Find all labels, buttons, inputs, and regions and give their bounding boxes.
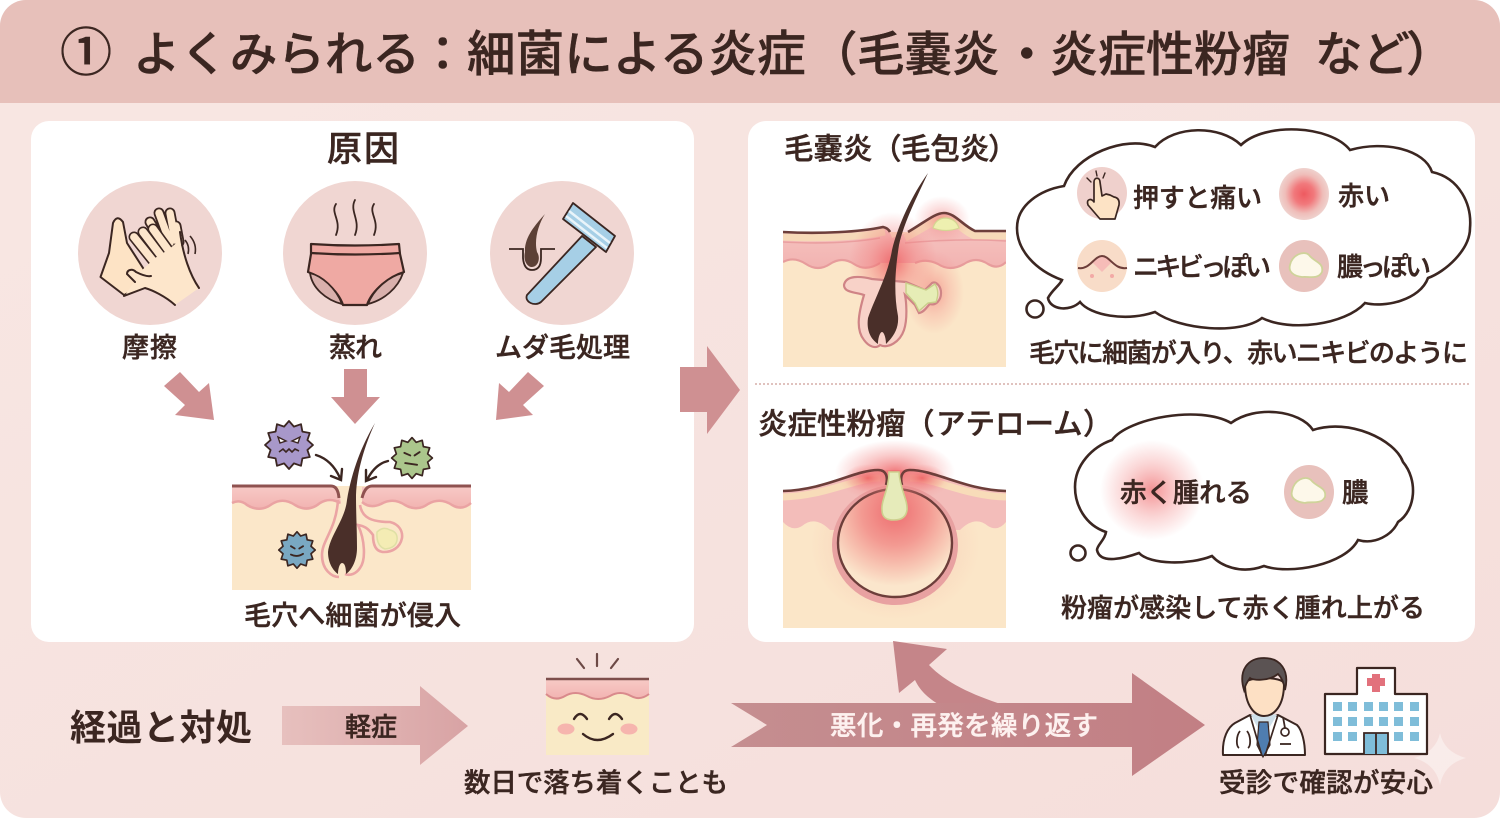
thought bubble: folliculitis symptoms: [1017, 129, 1470, 328]
icon: redness: [1279, 168, 1329, 220]
title: 炎症性粉瘤: [1050, 29, 1290, 82]
title: （: [810, 29, 858, 82]
bacterium: purple: [265, 421, 313, 469]
label: mild: 軽症: [345, 712, 397, 742]
label: hair removal: ムダ毛処理: [495, 333, 630, 363]
heading: course and treatment: 経過と対処: [70, 707, 252, 748]
icon: doctor: [1223, 658, 1305, 757]
bacterium: green: [392, 438, 432, 478]
heading: folliculitis: （: [872, 133, 902, 166]
icon: pus: [1284, 465, 1334, 519]
skin diagram: folliculitis: [783, 173, 1006, 367]
skin diagram: inflamed atheroma: [783, 440, 1006, 628]
header band: [0, 0, 1500, 103]
panel: causes: [31, 121, 694, 642]
title: 毛嚢炎: [857, 29, 1000, 82]
label: stuffiness: 蒸れ: [329, 333, 382, 363]
icon: pressing finger: [1077, 167, 1127, 219]
icon: red glow: [1100, 440, 1204, 540]
arrow: stuffiness to pore: [331, 369, 380, 424]
label: worsening: 悪化・再発を繰り返す: [830, 711, 1098, 741]
heading: inflamed atheroma: ）: [1083, 408, 1113, 441]
bacterium: blue: [279, 532, 315, 568]
heading: inflamed atheroma: （: [905, 408, 935, 441]
label: acne-like: ニキビっぽい: [1133, 252, 1271, 282]
arrow: worsening and recurrence: [731, 673, 1205, 776]
arrow: hair removal to pore: [496, 372, 544, 420]
title: など: [1315, 29, 1410, 82]
icon: shaving razor: [490, 181, 634, 325]
label: friction: 摩擦: [122, 333, 177, 363]
heading: causes: 原因: [327, 130, 399, 169]
label: painful when pressed: 押すと痛い: [1133, 183, 1262, 213]
heading: folliculitis: 毛嚢炎: [784, 133, 873, 166]
caption: atheroma: 粉瘤が感染して赤く腫れ上がる: [1061, 593, 1425, 623]
title: 細菌による炎症: [467, 28, 806, 82]
icon: hospital: [1325, 668, 1427, 754]
caption: may settle in days: 数日で落ち着くことも: [464, 768, 728, 798]
hair: [328, 423, 375, 574]
caption: see a doctor: 受診で確認が安心: [1219, 768, 1433, 798]
label: red: 赤い: [1338, 181, 1390, 211]
icon: pus: [1279, 240, 1329, 292]
caption: folliculitis: 毛穴に細菌が入り、赤いニキビのように: [1029, 338, 1468, 368]
icon: stuffy underwear: [283, 181, 427, 325]
arrow: back up to inflammation: [893, 641, 1004, 706]
arrow: causes to conditions: [680, 346, 740, 434]
title: ）: [1406, 29, 1454, 82]
label: pus: 膿: [1342, 478, 1368, 508]
label: swollen red: 赤く腫れる: [1120, 478, 1252, 508]
heading: folliculitis: ）: [988, 133, 1018, 166]
label: pus-like: 膿っぽい: [1337, 252, 1431, 282]
heading: inflamed atheroma: 炎症性粉瘤: [758, 408, 906, 441]
heading: folliculitis: 毛包炎: [901, 133, 990, 166]
icon: happy skin: [546, 654, 649, 755]
title: ：: [419, 29, 466, 82]
icon: pimple: [1077, 240, 1127, 292]
arrow: mild: [282, 686, 468, 765]
arrow: friction to pore: [164, 372, 214, 420]
title: ・: [1003, 29, 1050, 82]
panel: conditions: [748, 121, 1475, 642]
title: よくみられる: [133, 29, 420, 82]
heading: inflamed atheroma: アテローム: [936, 408, 1083, 441]
small arrows into pore: [316, 455, 388, 481]
icon: friction hands: [78, 181, 222, 325]
caption: bacteria enter pore: 毛穴へ細菌が侵入: [244, 601, 461, 631]
skin diagram: bacteria entering pore: [232, 421, 471, 590]
title: ①: [60, 25, 112, 83]
thought bubble: atheroma symptoms: [1070, 412, 1413, 570]
icon: sparkle: [1414, 733, 1466, 785]
